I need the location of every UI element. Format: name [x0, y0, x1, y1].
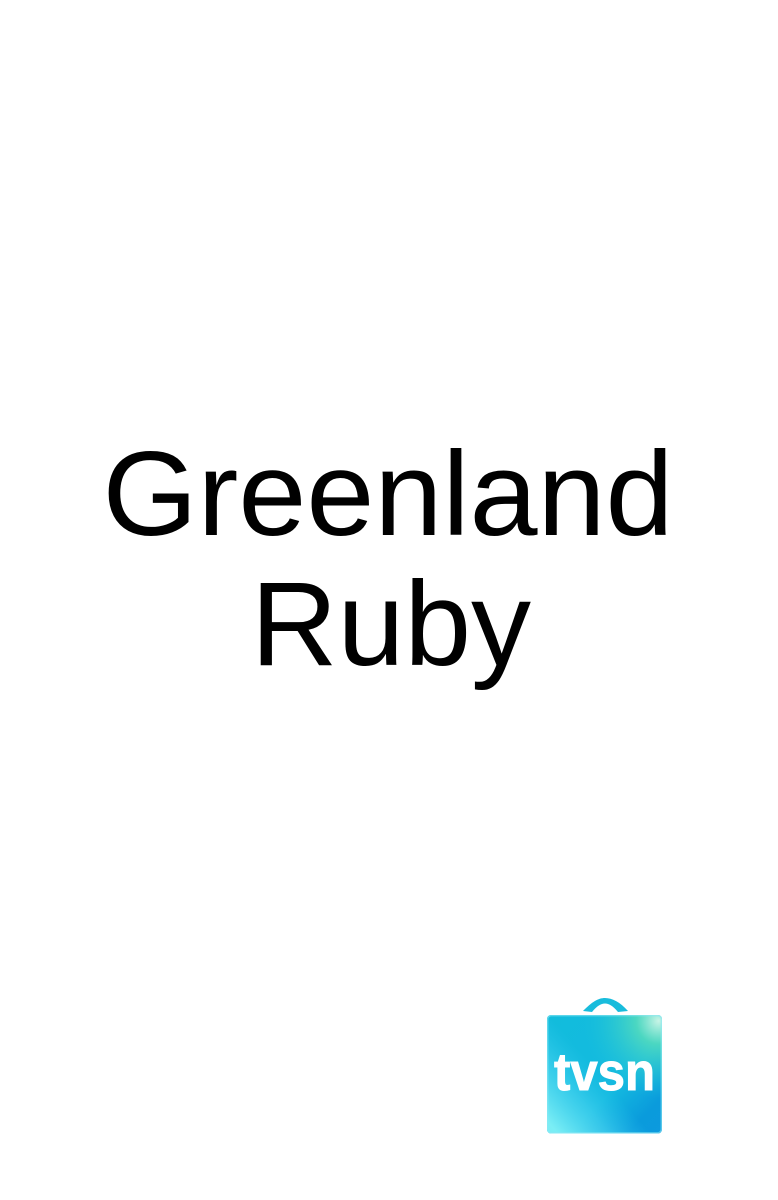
- title line: Ruby: Ruby: [251, 557, 531, 691]
- title line: Greenland: Greenland: [102, 427, 674, 561]
- logo: TVSN shopping bag: [547, 998, 662, 1134]
- logo text: tvsn: tvsn: [554, 1043, 655, 1102]
- icon: bag body: [547, 1015, 662, 1134]
- title: [102, 427, 674, 691]
- icon: bag handle: [583, 998, 628, 1012]
